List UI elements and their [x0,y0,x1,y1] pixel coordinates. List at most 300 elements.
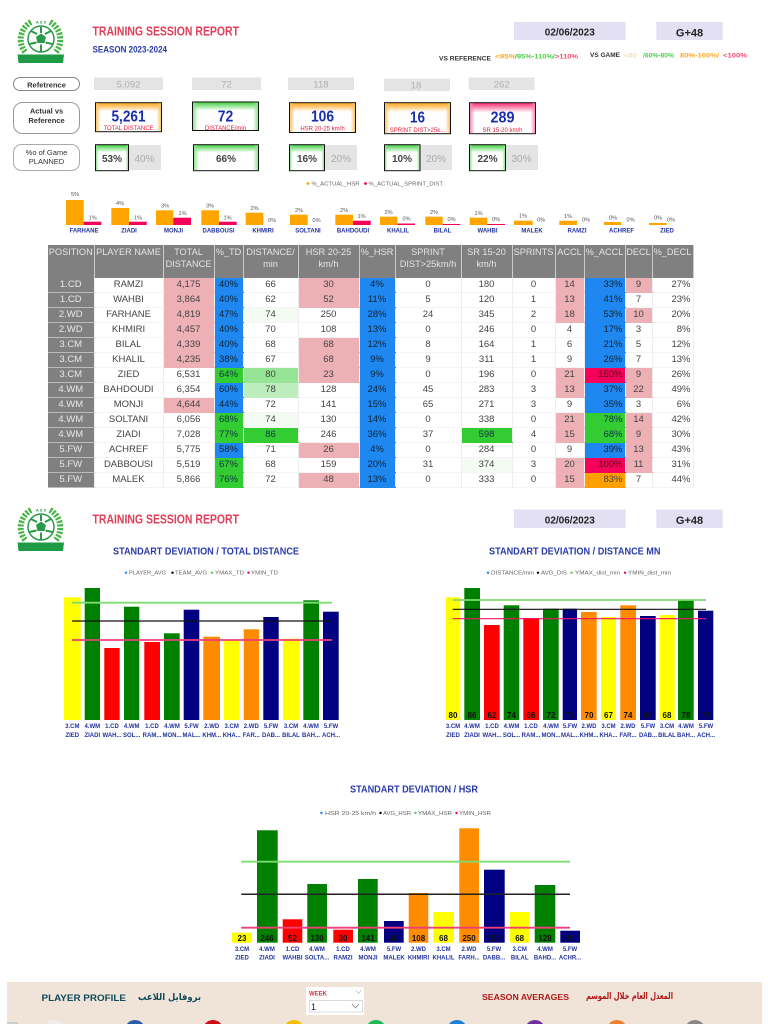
player statistics table: 80 [265,369,276,380]
percent of game: SR [470,145,538,171]
player statistics table: 11 [634,459,643,470]
player statistics table: 20% [367,459,386,470]
player statistics table: 27% [671,279,690,290]
player statistics table: 21 [564,369,575,380]
player statistics table: 246 [321,429,336,440]
player statistics table: ACCL [557,247,582,257]
game offset box: G+48 [676,28,703,40]
player statistics table: 0 [425,414,431,425]
bar chart: HSR: ACHR... [559,956,581,962]
player statistics table: 13 [564,294,575,305]
bar chart: total distance: MON... [162,733,182,739]
bar chart: distance per minute: 70 [585,711,594,720]
player statistics table: 1 [531,354,536,365]
bar chart: HSR: 246 [260,934,274,943]
bar chart: HSR: 5.FW [487,947,501,953]
player statistics table: FARHANE [106,309,151,320]
player statistics table: 150% [598,369,622,380]
player statistics table: 24 [423,309,433,320]
player statistics table: 7 [636,474,641,485]
player statistics table: 45 [423,384,433,395]
player statistics table: 10 [633,309,644,320]
bar chart: HSR: SOLTA... [305,956,330,962]
player statistics table: 4 [567,324,572,335]
player statistics table: 3 [531,399,536,410]
bar chart: total distance: DAB... [262,733,280,739]
bar chart: distance per minute: KHA... [600,733,618,739]
bar chart: total distance: 4.WM [84,724,100,730]
player statistics table: 22 [633,384,644,395]
bar chart: actual HSR and sprint per player: 2% [295,208,303,214]
bar chart: actual HSR and sprint per player [66,192,675,234]
player statistics table: 5,775 [177,444,200,455]
player statistics table: 47% [219,309,238,320]
player statistics table: 9 [636,369,641,380]
bar chart: total distance: FAR... [243,733,260,739]
player statistics table: 24% [367,384,386,395]
player statistics table: MALEK [112,474,145,485]
player profile heading arabic: بروفايل اللاعب [138,992,201,1003]
player statistics table: 0 [425,279,431,290]
player statistics table: MONJI [114,399,143,410]
bar chart: total distance: 5.FW [324,724,338,730]
bar chart: HSR: 2.WD [411,947,427,953]
player statistics table: 66 [265,279,276,290]
player statistics table: km/h [319,259,338,269]
player statistics table: 3 [636,324,641,335]
player statistics table: 3.CM [59,339,82,350]
player statistics table: 9% [370,369,384,380]
bar chart: total distance: BAH... [302,733,320,739]
bar chart: actual HSR and sprint per player: ZIADI [121,228,137,234]
bar chart: actual HSR and sprint per player: 1% [474,211,483,217]
bar chart: HSR: 250 [462,934,476,943]
bar chart: distance per minute: 72 [547,711,556,720]
bar chart: total distance: 1.CD [145,724,160,730]
bar chart: HSR: 128 [538,934,552,943]
player statistics table: 4,339 [177,339,200,350]
player statistics table: SPRINTS [514,247,553,257]
row label: actual vs reference: Actual vs [30,106,63,116]
player statistics table: 8% [677,324,690,335]
player statistics table: 9% [370,354,384,365]
legend: versus game: VS GAME [590,52,621,59]
player statistics table: 0 [531,279,536,290]
player statistics table: 71 [265,444,276,455]
player statistics table: 49% [671,384,690,395]
KPI card: HSR: HSR 20-25 km/h [300,126,345,132]
legend: actual HSR and sprint: %_ACTUAL_SPRINT_DIST [368,182,444,188]
player statistics table: 52 [323,294,334,305]
player statistics table: 250 [321,309,336,320]
bar chart: actual HSR and sprint per player: DABBOUSI [202,228,235,234]
bar chart: actual HSR and sprint per player: BAHDOUDI [337,228,369,234]
reference values: 118 [313,80,329,90]
player statistics table: 14 [633,414,644,425]
week slicer: 1 [311,1002,316,1012]
bar chart: distance per minute: 74 [507,711,516,720]
player profile heading: PLAYER PROFILE [42,993,126,1003]
player statistics table: 9 [567,399,572,410]
player statistics table: 68 [265,459,276,470]
legend: HSR chart: HSR 20-25 km/h [325,811,376,817]
bar chart: total distance: 1.CD [105,724,120,730]
bar chart: distance per minute: 1.CD [524,724,539,730]
player statistics table: 3 [636,399,641,410]
player statistics table: 31% [671,459,690,470]
player statistics table: 246 [479,324,494,335]
player statistics table: BAHDOUDI [103,384,154,395]
bar chart: actual HSR and sprint per player: 5% [71,192,79,198]
player statistics table: 6,056 [177,414,200,425]
bar chart: distance per minute: 4.WM [678,724,694,730]
legend: HSR chart: YMIN_HSR [459,811,491,817]
player selector circles [7,1020,705,1024]
bar chart: distance per minute: MAL... [561,733,579,739]
logo: club crest second header [18,508,64,551]
player statistics table: 6,531 [177,369,200,380]
player statistics table: RAMZI [114,279,143,290]
player statistics table: 4% [370,279,384,290]
bar chart: actual HSR and sprint per player: 3% [206,204,214,210]
bar chart: HSR: 3.CM [235,947,249,953]
bar chart: distance per minute: 74 [624,711,633,720]
date box: 02/06/2023 [545,28,595,38]
player statistics table: 65 [423,399,433,410]
legend: total distance chart [125,571,278,577]
bar chart: distance per minute: 68 [663,711,672,720]
player statistics table: 13% [671,354,690,365]
heading: distance per minute chart: STANDART DEVIATION / DISTANCE MN [489,547,660,558]
bar chart: distance per minute: MON... [542,733,561,739]
player statistics table: 30% [671,429,690,440]
bar chart: distance per minute: 66 [527,711,536,720]
player statistics table: KHMIRI [112,324,145,335]
reference values: 5,092 [117,80,140,90]
player statistics table: 311 [479,354,494,365]
player statistics table: 4,819 [177,309,200,320]
bar chart: actual HSR and sprint per player: 0% [667,218,675,224]
player statistics table: PLAYER NAME [96,247,161,257]
player statistics table: DISTANCE [166,259,211,269]
season averages heading arabic: المعدل العام خلال الموسم [586,991,673,1002]
player statistics table: 1 [531,294,536,305]
bar chart: HSR: 23 [238,934,247,943]
bar chart: actual HSR and sprint per player: 1% [519,214,527,220]
bar chart: HSR: MALEK [383,956,405,962]
bar chart: distance per minute: ZIED [446,733,460,739]
legend: versus game: <100% [723,52,747,60]
bar chart: total distance: ZIED [65,733,80,739]
legend: versus game: /60%-80% [643,52,674,60]
bar chart: HSR: BAHD... [534,956,556,962]
player statistics table: 14% [367,414,386,425]
player statistics table: 77% [219,429,238,440]
bar chart: total distance: SOL... [123,733,141,739]
heading: total distance chart: STANDART DEVIATION / TOTAL DISTANCE [113,547,299,558]
player statistics table: 86 [265,429,276,440]
player statistics table: 74 [265,414,276,425]
bar chart: HSR: 1.CD [286,947,300,953]
row label: reference [14,78,80,90]
bar chart: HSR: 2.WD [462,947,477,953]
bar chart: HSR: 4.WM [259,947,275,953]
player statistics table: 7,028 [177,429,200,440]
bar chart: HSR: 5.FW [563,947,577,953]
bar chart: HSR: FARH... [458,956,480,962]
percent of game: distance per minute: 66% [216,154,236,165]
player statistics table: 43% [671,444,690,455]
bar chart: HSR: RAMZI [334,956,353,962]
bar chart: actual HSR and sprint per player: 2% [384,210,393,216]
row label: percent of game planned [14,144,80,170]
player statistics table: ZIED [118,369,139,380]
player statistics table: HSR 20-25 [306,247,351,257]
player statistics table: 9 [567,444,572,455]
week slicer [306,987,364,1015]
player statistics table: 14 [564,279,575,290]
player statistics table: 83% [603,474,622,485]
player statistics table: 0 [531,369,536,380]
legend: versus reference: /95%-110%/ [515,54,555,60]
player statistics table: 1.CD [60,279,82,290]
bar chart: HSR: KHALIL [432,956,455,962]
bar chart: actual HSR and sprint per player: 4% [116,201,124,207]
player statistics table: 4% [370,444,384,455]
bar chart: HSR: WAHBI [282,956,303,962]
reference values [94,78,535,92]
bar chart: total distance: 2.WD [244,724,259,730]
bar chart: distance per minute: 72 [566,711,575,720]
player statistics table: 67 [265,354,276,365]
player statistics table: DISTANCE/ [246,247,295,257]
bar chart: distance per minute: 2.WD [620,724,636,730]
player statistics table: 41% [603,294,622,305]
bar chart: actual HSR and sprint per player: ZIED [660,228,674,234]
player statistics table: 598 [479,429,494,440]
bar chart: actual HSR and sprint per player: 0% [402,216,411,222]
legend: total distance chart: YMAX_TD [215,571,244,577]
bar chart: total distance: RAM... [143,733,162,739]
player statistics table: KHALIL [112,354,145,365]
player statistics table: 0 [425,444,431,455]
player statistics table: 130 [321,414,336,425]
player statistics table: 13 [633,444,644,455]
bar chart: actual HSR and sprint per player: 2% [430,210,438,216]
player statistics table: 9 [636,429,641,440]
row label: percent of game planned: %o of Game [26,148,67,157]
bar chart: HSR: 3.CM [513,947,527,953]
player statistics table: TOTAL [174,247,203,257]
bar chart: actual HSR and sprint per player: MONJI [164,228,183,234]
bar chart: HSR: KHMIRI [408,956,429,962]
bar chart: distance per minute: 2.WD [582,724,597,730]
player statistics table: 6% [677,399,690,410]
KPI card: SR 15-20: SR 15-20 km/h [482,128,523,134]
bar chart: HSR: 159 [487,934,501,943]
legend: distance per minute chart: DISTANCE/min [491,571,534,577]
player statistics table: 62 [265,294,276,305]
player statistics table: 9 [636,279,641,290]
player statistics table: 67% [219,459,238,470]
player statistics table: 7 [636,294,641,305]
bar chart: distance per minute: 71 [702,711,711,720]
title: TRAINING SESSION REPORT [92,24,239,38]
date box: second header: 02/06/2023 [545,516,595,526]
player statistics table: 4.WM [58,414,83,425]
bar chart: actual HSR and sprint per player: WAHBI [478,228,498,234]
bar chart: distance per minute: BAH... [677,733,695,739]
player statistics table: 0 [531,324,536,335]
date box [514,22,626,40]
bar chart: HSR: 4.WM [309,947,325,953]
KPI card: HSR: 106 [311,109,334,126]
player statistics table: 60% [219,384,238,395]
bar chart: distance per minute: 4.WM [543,724,559,730]
bar chart: actual HSR and sprint per player: 0% [654,216,662,222]
bar chart: distance per minute: FAR... [619,733,637,739]
player statistics table: 31 [423,459,433,470]
legend: HSR chart [320,811,491,817]
bar chart: distance per minute: 4.WM [464,724,480,730]
bar chart: distance per minute: DAB... [639,733,657,739]
legend: distance per minute chart: YMAX_dist_min [575,571,620,577]
percent of game: HSR: 16% [297,154,317,165]
percent of game: HSR [290,145,357,171]
bar chart: distance per minute: 68 [644,711,653,720]
player statistics table: 39% [603,444,622,455]
logo: club crest top [18,20,64,63]
player statistics table: 2.WD [59,324,83,335]
player statistics table: 38% [219,354,238,365]
player statistics table: 0 [425,324,431,335]
bar chart: actual HSR and sprint per player: 0% [447,217,456,223]
legend: distance per minute chart [487,571,671,577]
bar chart: total distance: 3.CM [225,724,239,730]
bar chart: total distance: 5.FW [184,724,199,730]
player statistics table: BILAL [116,339,141,350]
bar chart: distance per minute: 5.FW [563,724,577,730]
KPI card: SR 15-20 [470,103,536,134]
player statistics table: 13% [367,474,386,485]
bar chart: HSR: 30 [339,934,348,943]
bar chart: distance per minute: 62 [488,711,497,720]
legend: total distance chart: PLAYER_AVG [129,571,166,577]
bar chart: total distance: 3.CM [65,724,79,730]
player statistics table: 283 [479,384,494,395]
player statistics table: 9 [567,354,572,365]
bar chart: distance per minute: WAH... [482,733,502,739]
player statistics table: 26% [671,369,690,380]
player statistics table: 108 [321,324,336,335]
player statistics table: 5 [425,294,431,305]
KPI card: total distance: 5,261 [112,109,146,126]
legend: distance per minute chart: YMIN_dist_min [628,571,671,577]
player statistics table: DABBOUSI [104,459,153,470]
bar chart: HSR: ZIED [235,956,249,962]
player statistics table: 68 [323,339,334,350]
percent of game: sprint distance: 20% [426,154,446,165]
logo: club crest top: A S S [36,20,46,24]
player statistics table: 0 [531,414,536,425]
legend: actual HSR and sprint: %_ACTUAL_HSR [312,182,360,188]
player statistics table: 6,354 [177,384,200,395]
player statistics table: 48 [323,474,334,485]
player statistics table: min [263,259,278,269]
player statistics table: 196 [479,369,494,380]
percent of game: total distance: 40% [134,154,155,165]
player statistics table: 271 [479,399,494,410]
bar chart: total distance: 4.WM [303,724,319,730]
player statistics table: 40% [219,339,238,350]
player statistics table: 164 [479,339,494,350]
player statistics table: 4,644 [177,399,200,410]
bar chart: HSR: MONJI [358,956,378,962]
player statistics table: 20 [564,459,575,470]
KPI card: SR 15-20: 289 [490,110,515,127]
player statistics table: 5.FW [59,474,82,485]
week slicer: WEEK [309,992,328,998]
bar chart: total distance: 5.FW [264,724,278,730]
bar chart: distance per minute: KHM... [580,733,599,739]
date box: second header [514,510,626,528]
bar chart: distance per minute: ACH... [697,733,715,739]
player statistics table: ACHREF [109,444,148,455]
row label: actual vs reference [14,102,80,134]
player statistics table: 78% [603,414,622,425]
legend: versus reference: <95% [495,54,516,60]
player statistics table: 3.CM [59,354,82,365]
player statistics table: 3 [531,459,536,470]
bar chart: actual HSR and sprint per player: 0% [609,216,617,222]
season subtitle: SEASON 2023-2024 [92,44,167,54]
footer panel: player profile [7,982,762,1024]
player statistics table: 44% [219,399,238,410]
player statistics table: 68 [265,339,276,350]
player statistics table: 58% [219,444,238,455]
player statistics table: 11% [368,294,386,305]
KPI card: distance per minute: 72 [218,109,233,126]
player statistics table: 21% [603,339,622,350]
bar chart: total distance: 3.CM [284,724,298,730]
percent of game: SR: 30% [511,154,532,165]
bar chart: distance per minute: BILAL [658,733,676,739]
player statistics table: 180 [479,279,494,290]
bar chart: HSR: 48 [390,934,399,943]
KPI card: sprint distance: 16 [410,110,425,127]
KPI card: distance per minute [192,102,258,132]
player statistics table: 20% [671,309,690,320]
player statistics table: 374 [479,459,494,470]
player statistics table: 37 [423,429,433,440]
player statistics table: 4.WM [58,429,83,440]
bar chart: total distance: 4.WM [124,724,140,730]
row label: actual vs reference: Reference [28,116,65,125]
player statistics table: 17% [603,324,622,335]
bar chart: actual HSR and sprint per player: ACHREF [609,228,634,234]
bar chart: distance per minute: SOL... [503,733,520,739]
player statistics table: 2.WD [59,309,83,320]
bar chart: HSR [232,828,581,962]
percent of game: SR: 22% [477,154,498,165]
player statistics table: %_DECL [654,247,691,257]
player statistics table: 15 [564,429,575,440]
bar chart: distance per minute: 86 [468,711,477,720]
bar chart: HSR: 68 [515,934,525,943]
player statistics table: 5,519 [177,459,200,470]
bar chart: actual HSR and sprint per player: 1% [134,216,142,222]
player statistics table: 0 [531,474,536,485]
